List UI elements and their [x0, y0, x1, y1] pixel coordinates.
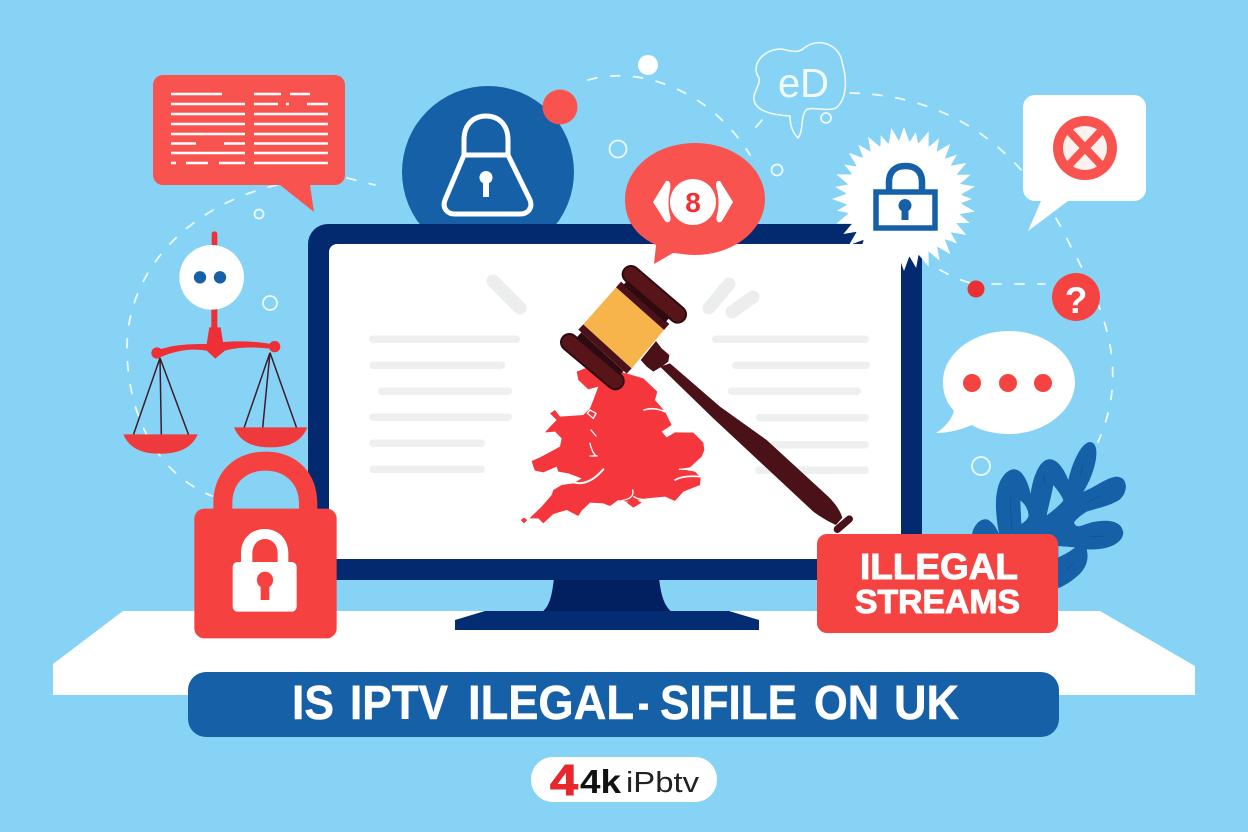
- white dot on path: [638, 55, 658, 75]
- scales beam: [157, 341, 275, 359]
- gavel: [569, 274, 849, 529]
- white lock icon: [241, 529, 288, 567]
- handle neck: [641, 341, 669, 372]
- keyhole: [479, 171, 493, 197]
- monitor stand neck: [542, 578, 672, 612]
- title text: ILEGAL: [468, 677, 634, 730]
- illegal streams label: [817, 534, 1058, 633]
- padlock outline: [444, 116, 531, 214]
- icon: blue padlock circle: [402, 86, 574, 258]
- title text: [292, 677, 959, 730]
- logo black text: 4k: [580, 763, 622, 800]
- UK map: [521, 368, 704, 523]
- bubble glyphs: eD: [778, 60, 829, 106]
- icon: red padlock: [194, 452, 337, 638]
- upper collar: [616, 282, 669, 330]
- padlock shackle: [889, 166, 922, 192]
- keyhole: [257, 572, 273, 600]
- right pan: [234, 427, 307, 447]
- dashed connector paths: [127, 76, 1113, 496]
- title text: IS: [292, 677, 334, 730]
- table surface: [53, 611, 1195, 695]
- logo red digit: 4: [550, 756, 579, 805]
- question mark badge: [1052, 273, 1100, 321]
- scale strings: [133, 353, 297, 435]
- right lens: [716, 181, 733, 222]
- face: [179, 245, 244, 310]
- small decorative circles: [254, 113, 990, 475]
- shackle: [213, 452, 317, 513]
- gavel head: [569, 274, 678, 381]
- monitor: [308, 224, 922, 630]
- white badge: [670, 179, 716, 225]
- logo pill: [531, 756, 717, 805]
- red bubble with number badge: [625, 143, 765, 264]
- coast cuts: [573, 409, 701, 501]
- plant gaps: [1020, 501, 1028, 524]
- padlock keyhole: [898, 199, 912, 220]
- question mark: ?: [1065, 280, 1087, 321]
- title text: ON: [814, 677, 879, 730]
- handle end cap: [837, 519, 849, 529]
- text lines: [171, 94, 328, 163]
- left pan: [123, 434, 198, 454]
- plant veins: [1010, 465, 1105, 570]
- title text: UK: [894, 677, 959, 730]
- antenna: [212, 231, 217, 247]
- red speech box with text lines: [153, 75, 345, 212]
- monitor stand base: [455, 611, 759, 630]
- small island: [521, 518, 527, 523]
- icon: justice scales with face: [123, 231, 307, 454]
- lower collar: [578, 324, 632, 374]
- isle of wight: [627, 498, 642, 508]
- upper cap: [631, 274, 678, 314]
- title text: SIFILE: [660, 677, 797, 730]
- monitor screen: [329, 244, 901, 559]
- logo light text: iPbtv: [626, 767, 700, 799]
- starburst with blue padlock: [827, 122, 980, 276]
- screen text lines: [369, 336, 870, 474]
- dots: [963, 374, 981, 392]
- padlock body: [876, 192, 935, 228]
- lock body: [194, 509, 337, 638]
- title text: IPTV: [350, 677, 448, 730]
- white chat bubble with dots: [936, 331, 1075, 434]
- outline thought bubble: [754, 43, 845, 138]
- white bubble with forbidden sign: [1023, 95, 1146, 231]
- left lens: [653, 181, 671, 222]
- label text line 2: STREAMS: [855, 583, 1020, 620]
- cross: [1068, 130, 1102, 166]
- scales stem: [207, 307, 223, 344]
- number: 8: [685, 187, 701, 218]
- title text: -: [638, 677, 649, 730]
- icon: blue plant: [972, 442, 1126, 588]
- gold band: [583, 287, 664, 368]
- gavel handle: [660, 363, 842, 525]
- lower cap: [569, 342, 615, 381]
- screen impact marks: [493, 281, 753, 312]
- monitor frame: [308, 224, 922, 580]
- forbidden circle: [1053, 116, 1117, 180]
- label text line 1: ILLEGAL: [860, 546, 1018, 587]
- title banner: [188, 672, 1059, 737]
- red notification dot: [542, 90, 578, 124]
- small red dot: [968, 280, 984, 298]
